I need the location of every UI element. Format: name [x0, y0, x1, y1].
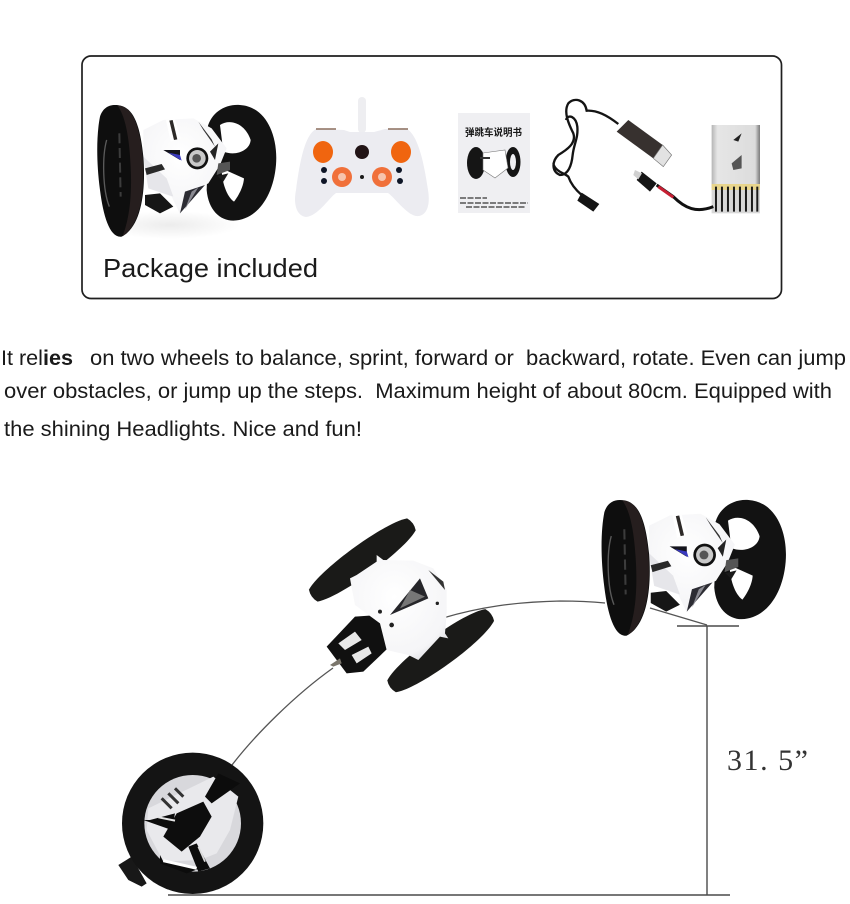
- panel: package included: [82, 56, 782, 298]
- line 3: the shining Headlights. Nice and fun!: [4, 418, 362, 441]
- icon: robot on the ground, wheel view: [118, 753, 263, 894]
- icon: robot mid-jump: [303, 511, 500, 700]
- icon: robot at peak of jump: [602, 500, 786, 636]
- label: jump height: 31. 5”: [727, 744, 808, 777]
- heading: package included: Package included: [103, 253, 318, 283]
- icon: lithium battery: [633, 125, 760, 213]
- text block: description: [1, 347, 846, 441]
- line 1 lead: It relies: [1, 347, 73, 370]
- line 2: over obstacles, or jump up the steps. Maximum height of about 80cm. Equipped with: [4, 380, 832, 403]
- panel frame: [82, 56, 782, 298]
- jump diagram: [118, 500, 808, 895]
- line 1: on two wheels to balance, sprint, forward or backward, rotate. Even can jump: [90, 347, 846, 370]
- floor shadow: [100, 211, 240, 239]
- icon: USB charging cable: [553, 100, 672, 212]
- icon: jumping robot car: [97, 105, 276, 237]
- icon: instruction booklet: [458, 113, 530, 213]
- arrow: jump trajectory arc: [232, 601, 707, 765]
- icon: remote controller: [295, 97, 429, 217]
- icon: instruction booklet: 弹跳车说明书: [465, 126, 522, 139]
- height measurement lines: [168, 626, 739, 895]
